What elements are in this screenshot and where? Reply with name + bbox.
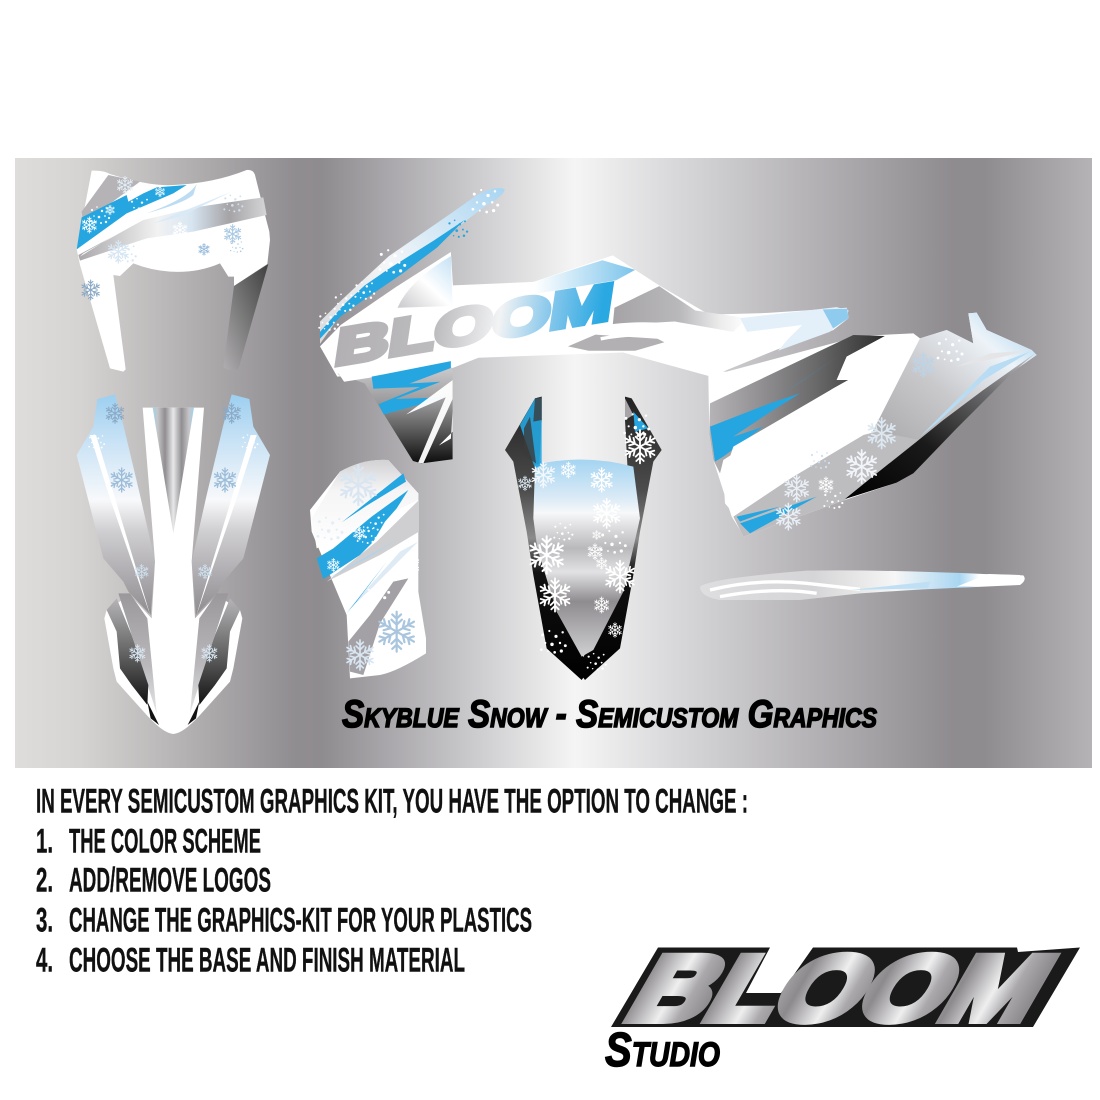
- dark band: [709, 335, 885, 473]
- graphic: headlight number plate: [77, 170, 270, 372]
- logo: BLOOM Studio: [605, 938, 1080, 1077]
- list item 3: CHANGE THE GRAPHICS-KIT FOR YOUR PLASTICS: [69, 902, 532, 940]
- list: customization options: [36, 822, 532, 980]
- light blue edge: [920, 352, 1030, 437]
- list item 2: [36, 862, 271, 900]
- graphic: rear side panel: [708, 313, 1037, 537]
- lower white nose silhouette: [104, 595, 242, 734]
- blue slash: [710, 393, 800, 462]
- list item 3: 3.: [36, 902, 53, 940]
- graphic: front fender: [505, 397, 662, 680]
- fender dome: [533, 460, 640, 657]
- left fender arm: [505, 397, 590, 680]
- logo plate: [611, 948, 1080, 1027]
- lower grey section: [733, 432, 920, 537]
- list item 1: [36, 822, 261, 860]
- logo subtitle: Studio: [605, 1024, 720, 1077]
- black stripe: [845, 353, 1035, 499]
- list item 4: 4.: [36, 942, 53, 980]
- title: kit name: Skyblue Snow - Semicustom Graphics: [342, 693, 877, 736]
- list item 4: CHOOSE THE BASE AND FINISH MATERIAL: [69, 942, 465, 980]
- white field: [723, 333, 917, 513]
- panel: metallic gradient backdrop: [15, 158, 1092, 768]
- upper right tail section: [867, 313, 1037, 457]
- center metallic wedge: [143, 408, 204, 722]
- text: BLOOM lettering on the side panel: BLOOM: [331, 272, 617, 377]
- list item 2: 2.: [36, 862, 53, 900]
- graphic: rear fender: [700, 570, 1025, 600]
- list item 3: [36, 902, 532, 940]
- graphic: side number plate: [310, 460, 426, 678]
- right fender arm: [577, 397, 662, 680]
- list item 1: THE COLOR SCHEME: [69, 822, 261, 860]
- graphic: radiator side panel with BLOOM lettering: [320, 252, 849, 463]
- list item 2: ADD/REMOVE LOGOS: [69, 862, 271, 900]
- white stripes: [90, 435, 257, 617]
- graphic: tank shroud upper wing: [318, 188, 504, 344]
- list item 4: [36, 942, 465, 980]
- lower grey panels: [118, 593, 157, 713]
- logo wordmark: BLOOM: [609, 938, 1073, 1040]
- left upper shroud: [77, 394, 155, 615]
- graphic: radiator shroud with center stripes: [77, 394, 270, 734]
- list item 1: 1.: [36, 822, 53, 860]
- right upper shroud: [192, 394, 270, 615]
